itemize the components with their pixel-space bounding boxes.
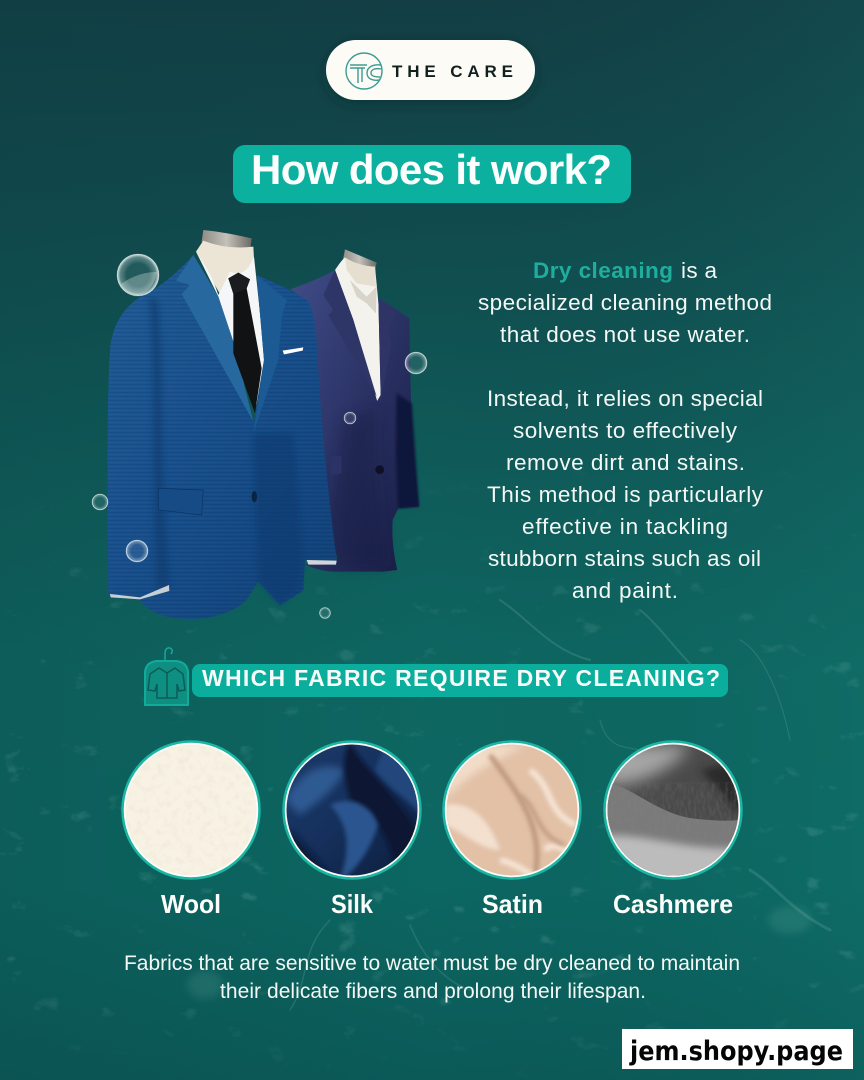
title text: How does it work? <box>251 146 612 193</box>
watermark: jem.shopy.page <box>629 1036 843 1067</box>
intro paragraph: that does not use water. <box>500 322 750 347</box>
icon: garment bag with shirt <box>145 648 188 705</box>
intro paragraph: Dry cleaning <box>533 258 673 283</box>
logo icon: TC monogram <box>346 53 382 89</box>
intro paragraph <box>478 258 772 603</box>
water bubbles <box>92 254 427 618</box>
intro paragraph: specialized cleaning method <box>478 290 772 315</box>
fabric: wool <box>122 741 260 919</box>
navy jacket <box>290 249 419 572</box>
section heading banner <box>192 664 728 697</box>
label: wool: Wool <box>161 889 221 919</box>
fabric: silk <box>283 741 425 919</box>
illustration: two suit jackets on mannequins <box>108 230 419 619</box>
intro paragraph: and paint. <box>572 578 678 603</box>
intro paragraph: This method is particularly <box>487 482 764 507</box>
label: satin: Satin <box>482 889 543 919</box>
brand name: THE CARE <box>392 62 513 81</box>
intro paragraph: stubborn stains such as oil <box>488 546 761 571</box>
logo pill <box>326 40 535 100</box>
intro paragraph: remove dirt and stains. <box>506 450 745 475</box>
fabric: cashmere <box>604 741 742 919</box>
intro paragraph: Instead, it relies on special <box>487 386 763 411</box>
label: silk: Silk <box>331 889 373 919</box>
intro paragraph: solvents to effectively <box>513 418 738 443</box>
section heading text: WHICH FABRIC REQUIRE DRY CLEANING? <box>202 665 720 691</box>
intro paragraph: effective in tackling <box>522 514 728 539</box>
closing note: Fabrics that are sensitive to water must be dry cleaned to maintain <box>124 952 740 975</box>
fabric: satin <box>443 741 581 919</box>
title banner <box>233 145 631 203</box>
intro paragraph: is a <box>681 258 717 283</box>
closing note: their delicate fibers and prolong their lifespan. <box>220 980 646 1003</box>
blue jacket <box>108 230 337 619</box>
closing note <box>124 952 740 1003</box>
label: cashmere: Cashmere <box>613 889 733 919</box>
